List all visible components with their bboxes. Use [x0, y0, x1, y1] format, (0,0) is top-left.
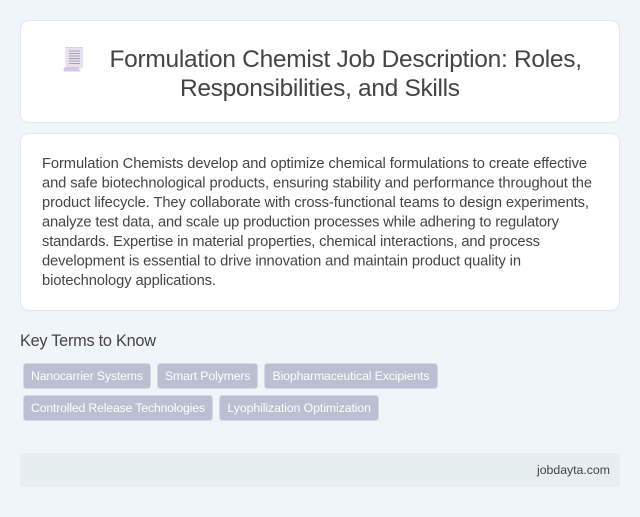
- tag list: [24, 364, 438, 420]
- tag: smart polymers: Smart Polymers: [165, 369, 250, 383]
- title: Formulation Chemist Job Description: Roles,: [110, 46, 582, 73]
- tag: nanocarrier systems: [24, 364, 150, 388]
- footer: [20, 453, 620, 487]
- footer source text: jobdayta.com: [536, 463, 610, 477]
- tag: lyophilization optimization: Lyophilization Optimization: [228, 401, 371, 415]
- title: [110, 46, 582, 102]
- description text: development is essential to drive innovation and maintain product quality in: [42, 254, 521, 270]
- description text: biotechnology applications.: [42, 273, 216, 289]
- description text: standards. Expertise in material properties, chemical interactions, and process: [42, 234, 540, 250]
- title: Responsibilities, and Skills: [180, 75, 460, 102]
- panel: title card: [20, 20, 620, 122]
- description text: Formulation Chemists develop and optimize chemical formulations to create effective: [42, 156, 587, 172]
- tag: biopharmaceutical excipients: Biopharmaceutical Excipients: [272, 369, 430, 383]
- tag: controlled release technologies: Controlled Release Technologies: [31, 401, 205, 415]
- description text: and safe biotechnological products, ensuring stability and performance throughout the: [42, 176, 592, 192]
- description text: product lifecycle. They collaborate with cross-functional teams to design experiments,: [42, 195, 589, 211]
- description text: [42, 156, 592, 289]
- heading: key terms: Key Terms to Know: [20, 332, 156, 350]
- tag: smart polymers: [158, 364, 258, 388]
- tag: biopharmaceutical excipients: [264, 364, 438, 388]
- tag: nanocarrier systems: Nanocarrier Systems: [31, 369, 143, 383]
- icon: document scroll: [64, 47, 83, 72]
- tag: controlled release technologies: [24, 396, 212, 420]
- panel: description card: [20, 134, 620, 310]
- description text: analyze test data, and scale up production processes while adhering to regulatory: [42, 214, 560, 230]
- tag: lyophilization optimization: [220, 396, 378, 420]
